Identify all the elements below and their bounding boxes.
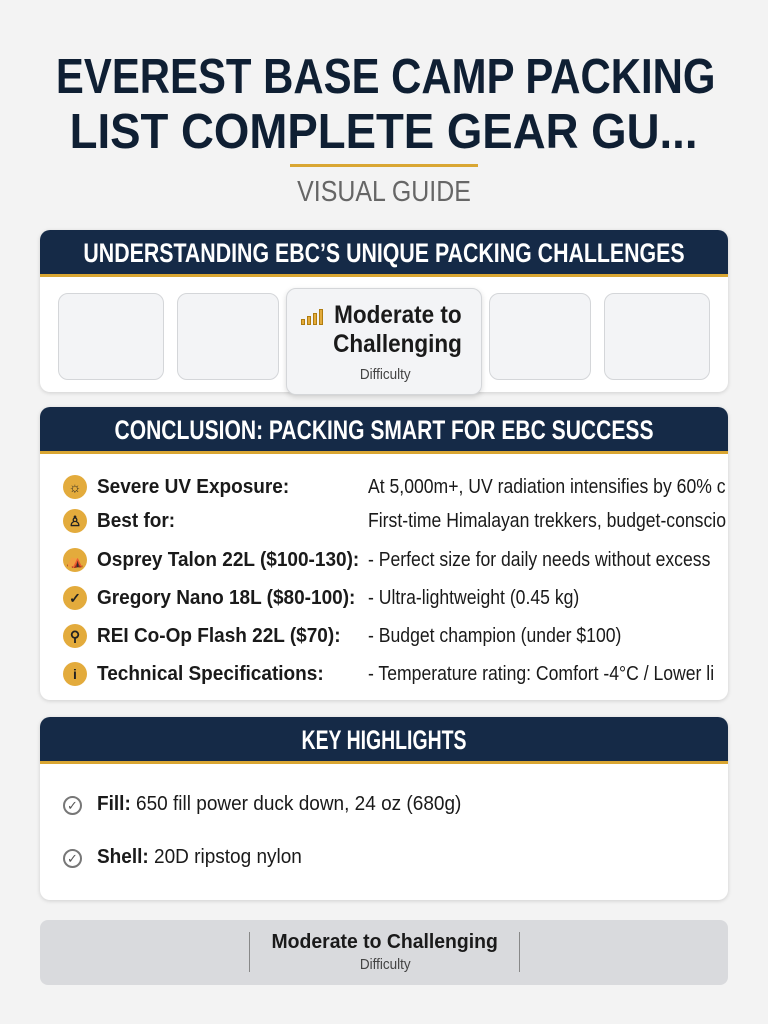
- row: gregory: [63, 586, 579, 610]
- title: LIST COMPLETE GEAR GU...: [70, 105, 698, 159]
- heading: challenges: [40, 230, 728, 277]
- row: best for: ♙: [69, 513, 81, 529]
- row: gregory: - Ultra-lightweight (0.45 kg): [368, 587, 579, 609]
- highlight: shell: Shell: 20D ripstog nylon: [97, 846, 302, 868]
- card 2: [177, 293, 279, 380]
- row: osprey: [63, 548, 710, 572]
- row: best for: First-time Himalayan trekkers, budget-conscio: [368, 510, 726, 532]
- row: best for: [63, 509, 726, 533]
- difficulty text: Challenging: [334, 330, 462, 358]
- footer: difficulty bar: [40, 920, 728, 985]
- panel: packing challenges: [40, 230, 728, 392]
- panel: key highlights: [40, 717, 728, 900]
- card 4: [489, 293, 591, 380]
- difficulty text: Moderate to: [334, 301, 462, 329]
- row: rei: [63, 624, 621, 648]
- row: osprey: ⛺: [66, 552, 84, 568]
- icon: signal bars: [301, 309, 323, 325]
- row: specs: Technical Specifications:: [97, 663, 324, 685]
- card: difficulty highlight: Difficulty: [360, 366, 410, 383]
- heading: key highlights: KEY HIGHLIGHTS: [302, 725, 466, 755]
- heading: challenges: UNDERSTANDING EBC’S UNIQUE PACKING CHALLENGES: [83, 238, 685, 268]
- heading: key highlights: [40, 717, 728, 764]
- row: gregory: Gregory Nano 18L ($80-100):: [97, 587, 355, 609]
- card 1: [58, 293, 164, 380]
- row: osprey: - Perfect size for daily needs without excess: [368, 549, 710, 571]
- footer text: Difficulty: [360, 956, 410, 973]
- row: UV: Severe UV Exposure:: [97, 476, 289, 498]
- card 5: [604, 293, 710, 380]
- row: rei: - Budget champion (under $100): [368, 625, 621, 647]
- row: specs: i: [73, 666, 77, 682]
- title: EVEREST BASE CAMP PACKING: [56, 50, 715, 104]
- footer text: Moderate to Challenging: [272, 931, 498, 953]
- card: difficulty highlight: [286, 288, 482, 395]
- heading: conclusion: CONCLUSION: PACKING SMART FOR EBC SUCCESS: [114, 415, 654, 445]
- heading: conclusion: [40, 407, 728, 454]
- subtitle: VISUAL GUIDE: [297, 176, 471, 208]
- row: osprey: Osprey Talon 22L ($100-130):: [97, 549, 359, 571]
- highlight: fill: Fill: 650 fill power duck down, 24 oz (680g): [97, 793, 461, 815]
- difficulty text: [334, 301, 462, 358]
- highlight: shell: ✓: [67, 851, 78, 866]
- row: best for: Best for:: [97, 510, 175, 532]
- row: specs: [63, 662, 714, 686]
- title: [56, 50, 715, 159]
- row: specs: - Temperature rating: Comfort -4°C / Lower li: [368, 663, 714, 685]
- row: UV: [63, 475, 726, 499]
- row: UV: ☼: [69, 479, 81, 495]
- highlight: fill: ✓: [67, 798, 78, 813]
- panel: conclusion: [40, 407, 728, 700]
- gold accent line: [290, 164, 478, 167]
- footer text: [272, 931, 498, 973]
- row: gregory: ✓: [69, 590, 81, 606]
- row: UV: At 5,000m+, UV radiation intensifies by 60% c: [368, 476, 726, 498]
- row: rei: ⚲: [70, 628, 80, 644]
- row: rei: REI Co-Op Flash 22L ($70):: [97, 625, 341, 647]
